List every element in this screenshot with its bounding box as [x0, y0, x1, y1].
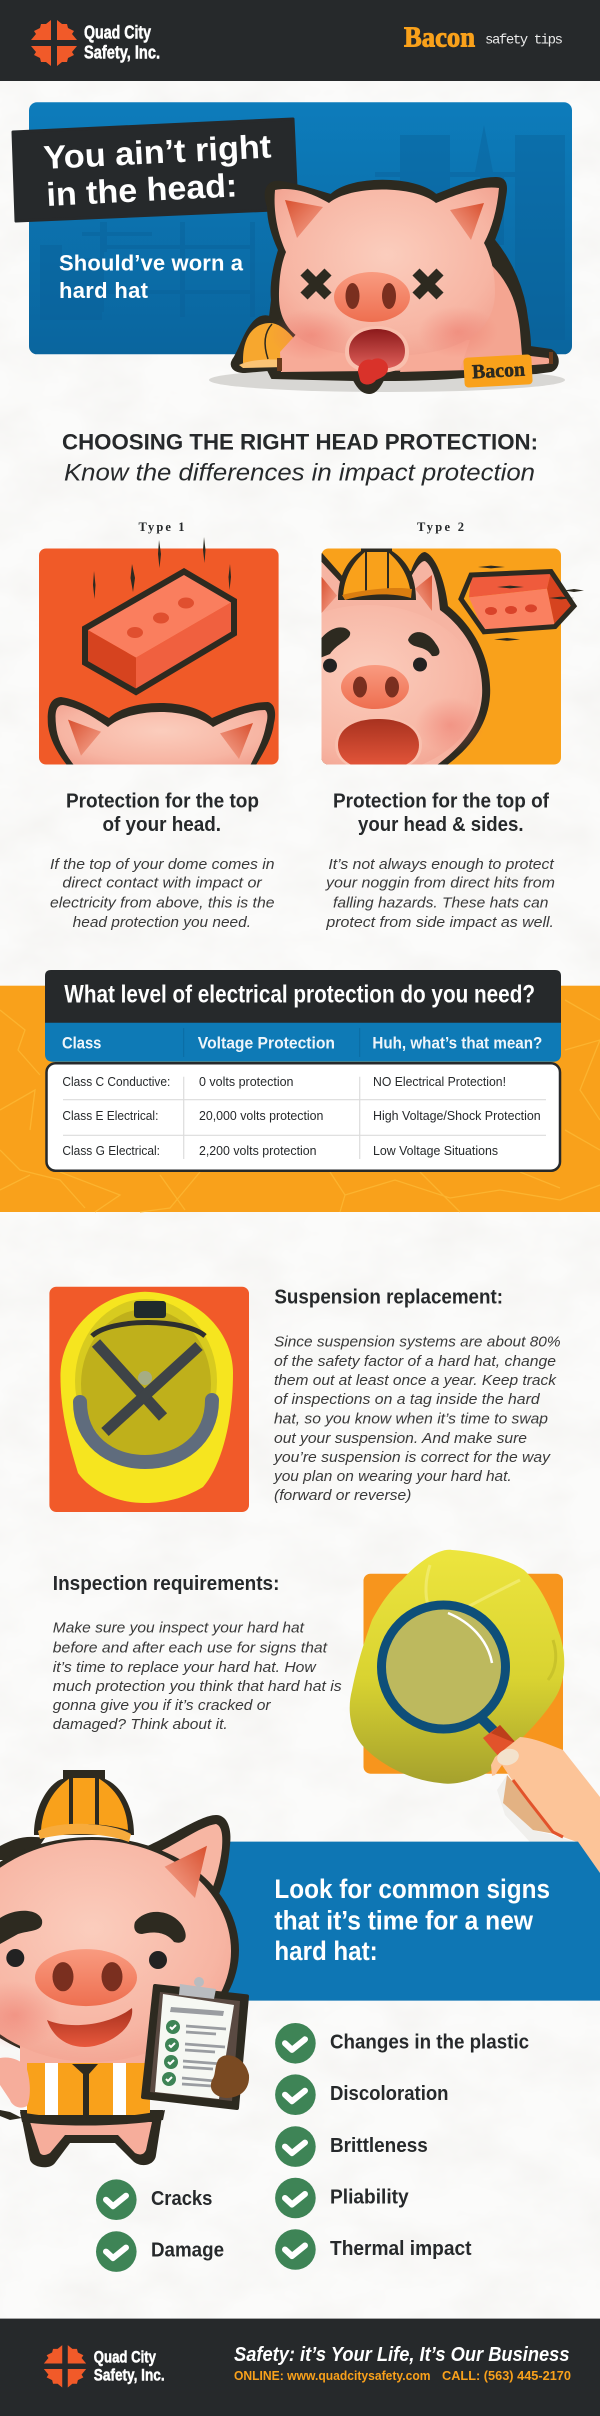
- company name: Quad City: [84, 22, 151, 42]
- text: type 1 description: Protection for the top: [66, 790, 259, 812]
- dropped hard hat: [239, 323, 310, 368]
- type 2 label: Type 2: [417, 520, 464, 534]
- Bacon tag: Bacon: [471, 359, 526, 383]
- heading: choosing head protection: Know the differences in impact protection: [64, 459, 535, 486]
- suspension body text: (forward or reverse): [274, 1487, 411, 1504]
- footer contact: ONLINE: www.quadcitysafety.com: [234, 2369, 430, 2383]
- smile: [47, 2008, 132, 2047]
- footer company name: Safety, Inc.: [94, 2366, 165, 2384]
- item: damage: Damage: [151, 2240, 224, 2262]
- suspension body text: [273, 1334, 561, 1504]
- icon: footer logo: [44, 2345, 86, 2387]
- brick: [461, 572, 574, 632]
- series title: safety tips: [485, 32, 563, 48]
- text: type 1 description: head protection you need.: [73, 914, 251, 931]
- suspension body text: of inspections on a tag inside the hard: [274, 1391, 540, 1408]
- inspection body text: Make sure you inspect your hard hat: [53, 1620, 305, 1637]
- legs: [20, 2110, 163, 2167]
- table body: Class C Conductive:: [62, 1074, 170, 1089]
- ground shadow: [209, 368, 565, 392]
- text: type 1 description: electricity from above, this is the: [50, 894, 274, 911]
- hero title: You ain’t right: [42, 128, 272, 176]
- image: magnifier over hard hat: [350, 1550, 600, 1873]
- speed lines: [478, 566, 584, 641]
- item: pliability: [275, 2178, 410, 2218]
- inspection heading: Inspection requirements:: [53, 1573, 279, 1595]
- illustration: falling brick on bare head: [39, 537, 279, 770]
- hard hat: [338, 548, 416, 600]
- mouth: [335, 719, 422, 764]
- pig head: [275, 187, 499, 356]
- item: brittleness: Brittleness: [330, 2135, 428, 2157]
- illustration: knocked out pig: [232, 178, 558, 393]
- footer bar: [0, 2319, 600, 2416]
- image: hard hat interior: [49, 1287, 249, 1512]
- panel: type 1: [0, 520, 600, 2416]
- snout: [334, 272, 410, 322]
- footer company name: [94, 2348, 165, 2384]
- motion lines: [93, 537, 231, 599]
- snout: [35, 1949, 137, 2006]
- text: type 2 description: Protection for the top of: [333, 790, 549, 812]
- banner title: [274, 1874, 550, 1966]
- table header row: [45, 1023, 561, 1062]
- hard hat: [34, 1770, 134, 1842]
- item: changes in the plastic: [275, 2023, 529, 2064]
- snout: [341, 665, 409, 709]
- item: discoloration: [275, 2074, 448, 2115]
- table header row: Voltage Protection: [198, 1034, 335, 1052]
- item: brittleness: [275, 2126, 428, 2167]
- table body: Class G Electrical:: [62, 1143, 160, 1158]
- inspection body text: [53, 1620, 342, 1733]
- X eyes: [304, 272, 440, 296]
- text: type 2 description: protect from side impact as well.: [325, 914, 554, 931]
- heading: choosing head protection: CHOOSING THE RIGHT HEAD PROTECTION:: [62, 429, 538, 454]
- footer contact: CALL: (563) 445-2170: [442, 2369, 571, 2383]
- hero subtitle: Should’ve worn a: [59, 251, 244, 276]
- item: pliability: Pliability: [330, 2186, 410, 2208]
- text: type 1 description: [50, 790, 274, 931]
- text: type 2 description: your head & sides.: [358, 814, 524, 836]
- banner title: hard hat:: [274, 1936, 378, 1966]
- panel: type 2: [0, 520, 600, 2416]
- banner title: Look for common signs: [274, 1874, 550, 1904]
- inspection body text: gonna give you if it’s cracked or: [53, 1697, 272, 1714]
- table body: NO Electrical Protection!: [373, 1074, 506, 1089]
- item: changes in the plastic: Changes in the plastic: [330, 2032, 529, 2054]
- construction skyline: [40, 125, 565, 340]
- text: type 1 description: direct contact with impact or: [62, 875, 263, 892]
- callout banner: [13, 119, 297, 221]
- suspension body text: hat, so you know when it’s time to swap: [274, 1410, 548, 1427]
- hero title: [42, 128, 272, 213]
- hand: [491, 1737, 600, 1873]
- suspension body text: of the safety factor of a hard hat, change: [274, 1353, 556, 1370]
- inspection body text: it’s time to replace your hard hat. How: [53, 1659, 317, 1676]
- table body: 2,200 volts protection: [199, 1143, 316, 1158]
- table body: High Voltage/Shock Protection: [373, 1108, 541, 1123]
- hero title: in the head:: [45, 166, 238, 213]
- table header row: Class: [62, 1034, 101, 1052]
- panel: hero: [13, 102, 572, 393]
- footer contact: [234, 2369, 571, 2383]
- suspension body text: them out at least once a year. Keep track: [274, 1372, 558, 1389]
- open mouth and tongue: [345, 326, 409, 384]
- eyes: [323, 658, 427, 673]
- illustration: pig in hard hat with side impact: [322, 548, 584, 764]
- hoof: [211, 2055, 249, 2098]
- inspection body text: damaged? Think about it.: [53, 1716, 228, 1733]
- text: type 2 description: falling hazards. These hats can: [333, 894, 548, 911]
- safety vest: [20, 2063, 165, 2126]
- eyebrows: [0, 1911, 186, 1944]
- left arm: [0, 2057, 30, 2108]
- hat ridges: [426, 1565, 520, 1610]
- table body: Low Voltage Situations: [373, 1143, 498, 1158]
- panel: inspection requirements: [53, 1550, 600, 1873]
- Bacon tag: [463, 354, 533, 388]
- inspection body text: much protection you think that hard hat is: [53, 1678, 342, 1695]
- text: type 1 description: of your head.: [102, 814, 221, 836]
- panel: common signs banner: [200, 1842, 600, 2001]
- footer slogan: Safety: it’s Your Life, It’s Our Business: [234, 2344, 570, 2366]
- hero subtitle: hard hat: [59, 278, 149, 303]
- table header row: Huh, what’s that mean?: [372, 1034, 542, 1052]
- suspension body text: you plan on wearing your hard hat.: [273, 1468, 512, 1485]
- header bar: [0, 0, 600, 81]
- panel: suspension replacement: [49, 1286, 561, 1512]
- hero subtitle: [59, 251, 244, 303]
- magnifying glass: [382, 1605, 540, 1775]
- item: thermal impact: [275, 2229, 472, 2270]
- suspension body text: out your suspension. And make sure: [274, 1430, 527, 1447]
- panel: electrical protection band: [0, 970, 600, 1212]
- type 1 label: Type 1: [138, 520, 184, 534]
- head: [0, 1837, 239, 2063]
- icon: company logo: [31, 20, 77, 66]
- text: type 1 description: If the top of your dome comes in: [50, 856, 274, 873]
- text: type 2 description: your noggin from direct hits from: [325, 875, 555, 892]
- item: discoloration: Discoloration: [330, 2083, 448, 2105]
- illustration: inspector pig with clipboard: [0, 1770, 249, 2167]
- inspection body text: before and after each use for signs that: [53, 1640, 328, 1657]
- item: thermal impact: Thermal impact: [330, 2238, 472, 2260]
- text: type 2 description: It’s not always enough to protect: [328, 856, 555, 873]
- text: type 2 description: [325, 790, 555, 931]
- banner title: that it’s time for a new: [274, 1905, 534, 1935]
- table body: 20,000 volts protection: [199, 1108, 323, 1123]
- footer company name: Quad City: [94, 2348, 156, 2366]
- company name: Safety, Inc.: [84, 42, 160, 62]
- ear: [138, 1815, 230, 1905]
- table body: Class E Electrical:: [62, 1108, 158, 1123]
- item: cracks: Cracks: [151, 2188, 212, 2210]
- checklist: [162, 2020, 180, 2086]
- checklist: right column: [275, 2023, 529, 2270]
- brick: [85, 572, 234, 692]
- heading: choosing head protection: [62, 429, 538, 486]
- series title: [404, 22, 563, 54]
- clipboard: [143, 1977, 247, 2108]
- checklist: left column: [96, 2179, 224, 2272]
- suspension body text: you’re suspension is correct for the way: [273, 1449, 552, 1466]
- series title: Bacon: [404, 22, 475, 54]
- table body: 0 volts protection: [199, 1074, 294, 1089]
- suspension body text: Since suspension systems are about 80%: [274, 1334, 561, 1351]
- pig head top: [48, 697, 275, 770]
- eyebrows: [320, 627, 439, 658]
- suspension straps: [92, 1322, 205, 1432]
- eyes: [6, 1949, 167, 1969]
- table title bar: [45, 970, 561, 1023]
- suspension heading: Suspension replacement:: [274, 1286, 503, 1308]
- table body: [46, 1063, 560, 1171]
- company name: [84, 22, 160, 62]
